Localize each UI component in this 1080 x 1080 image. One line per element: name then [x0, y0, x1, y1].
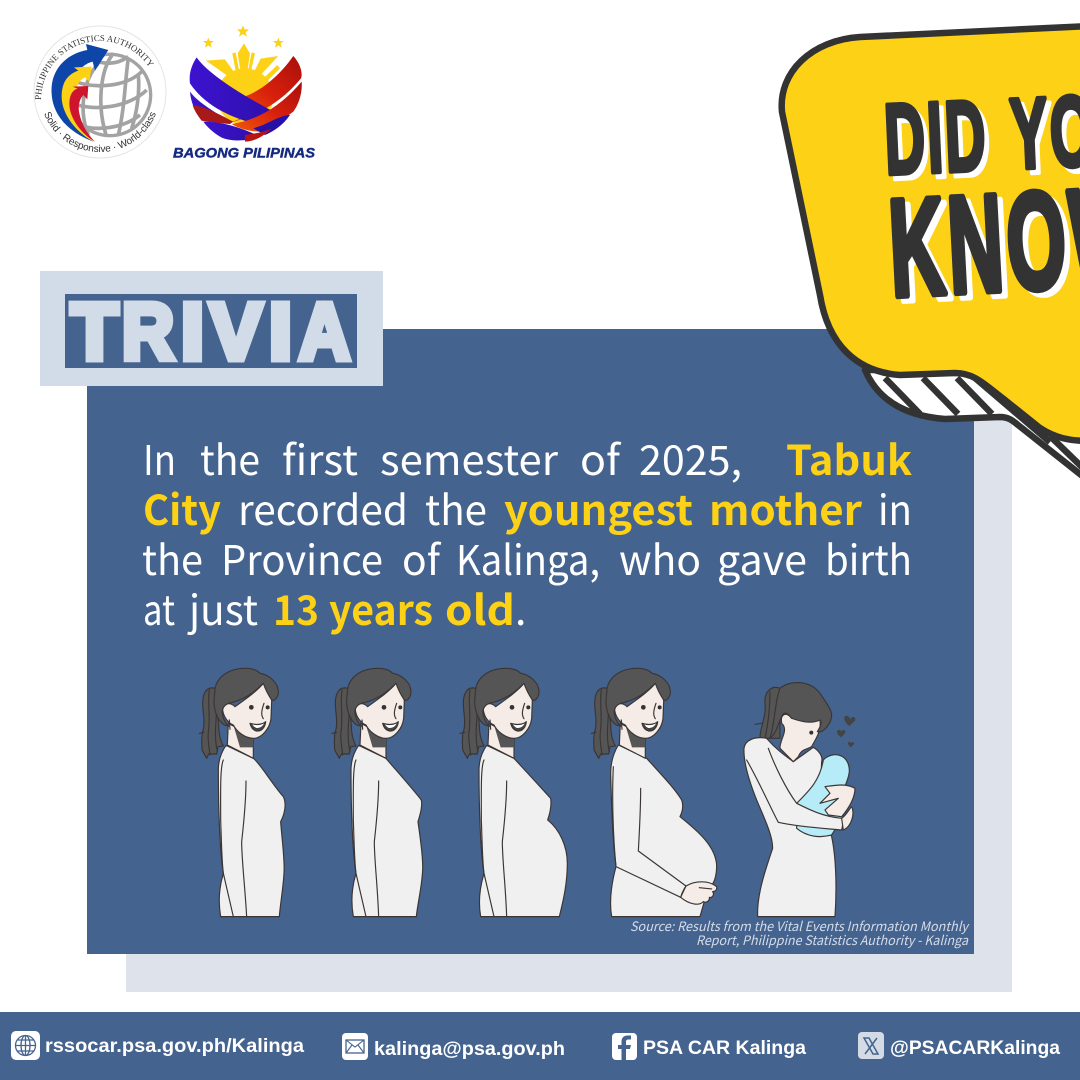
heading: trivia badge: T — [71, 287, 118, 376]
text block: main statement: first — [282, 427, 358, 487]
illustration: mother holding baby — [744, 683, 855, 917]
logo: Bagong Pilipinas: BAGONG PILIPINAS — [173, 146, 315, 160]
text block: main statement: Tabuk — [786, 427, 912, 487]
text block: main statement: youngest — [504, 477, 693, 537]
text block: main statement: semester — [380, 427, 558, 487]
text block: main statement: . — [515, 577, 526, 637]
text block: main statement — [142, 427, 912, 637]
logo: Philippine Statistics Authority — [34, 26, 166, 158]
illustration: woman third stage — [460, 668, 567, 917]
text block: main statement: years — [329, 577, 433, 637]
panel: main blue — [87, 329, 974, 954]
contact: X — [858, 1032, 1060, 1059]
source note — [630, 916, 970, 949]
text block: main statement: just — [187, 577, 258, 637]
text block: main statement: who — [619, 527, 701, 587]
bubble body — [782, 26, 1080, 441]
illustration: woman early stage — [199, 668, 285, 917]
text: did you — [882, 74, 1080, 201]
contact: email: kalinga@psa.gov.ph — [374, 1038, 565, 1060]
heading: trivia badge — [40, 271, 383, 386]
source note: Source: Results from the Vital Events Information Monthly — [630, 916, 970, 935]
text block: main statement: Kalinga, — [456, 527, 600, 587]
text block: main statement: the — [142, 527, 203, 587]
text block: main statement: of — [402, 527, 442, 587]
text block: main statement: at — [143, 577, 175, 637]
text: did you: DID — [887, 86, 995, 201]
bubble backing with stripes — [865, 370, 1080, 478]
text block: main statement: old — [445, 577, 515, 637]
text block: main statement: of — [580, 427, 622, 487]
text block: main statement: recorded — [238, 477, 408, 537]
text block: main statement: 2025, — [639, 427, 742, 487]
text block: main statement: mother — [709, 477, 862, 537]
text block: main statement: in — [878, 477, 912, 537]
text block: main statement: gave — [717, 527, 807, 587]
text: did you: DID — [882, 81, 990, 196]
text block: main statement: In — [143, 427, 176, 487]
text block: main statement: the — [200, 427, 260, 487]
heading: trivia badge: V — [210, 287, 262, 376]
contact: X: @PSACARKalinga — [890, 1037, 1060, 1059]
source note: Report, Philippine Statistics Authority - Kalinga — [696, 930, 969, 949]
contact: facebook: PSA CAR Kalinga — [643, 1037, 806, 1059]
text block: main statement: Province — [221, 527, 383, 587]
text block: main statement: City — [143, 477, 221, 537]
text block: main statement: birth — [825, 527, 912, 587]
text block: main statement: the — [425, 477, 487, 537]
illustration: woman full term — [591, 668, 717, 917]
heading: trivia badge: R — [122, 287, 174, 376]
illustration: woman second stage — [332, 668, 423, 917]
contact: email — [342, 1033, 565, 1060]
heading: trivia badge: A — [299, 287, 350, 376]
callout: did you know speech bubble — [782, 26, 1080, 478]
contact: facebook — [612, 1033, 806, 1060]
heading: trivia badge: I — [269, 287, 292, 376]
text block: main statement: 13 — [273, 577, 319, 637]
contact: website: rssocar.psa.gov.ph/Kalinga — [45, 1035, 304, 1057]
panel: light backing — [126, 420, 1012, 992]
footer bar — [0, 1012, 1080, 1080]
logo: Philippine Statistics Authority: Solid · Responsive · World-class — [44, 112, 156, 152]
heading: trivia badge: I — [181, 287, 204, 376]
contact: website — [11, 1031, 304, 1060]
logo: Philippine Statistics Authority: PHILIPPINE STATISTICS AUTHORITY — [35, 35, 154, 100]
logo: Bagong Pilipinas — [173, 25, 315, 161]
